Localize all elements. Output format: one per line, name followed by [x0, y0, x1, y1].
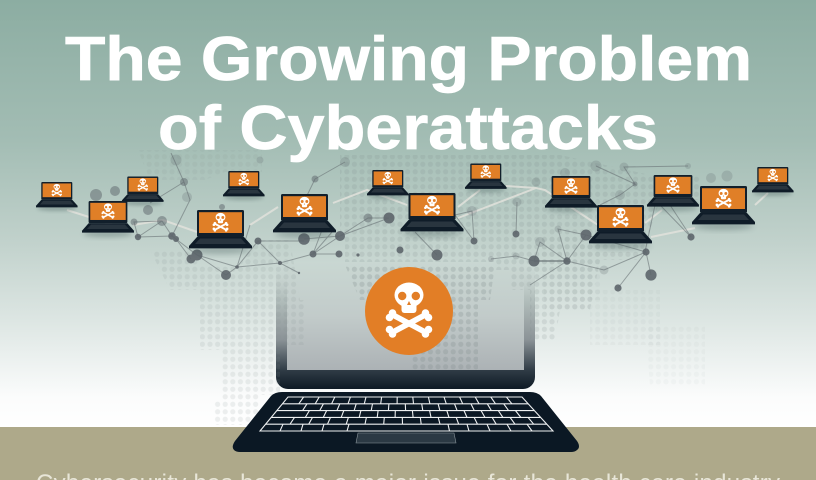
touchpad — [356, 433, 456, 443]
title: The Growing Problem — [65, 25, 752, 94]
network nodes — [90, 154, 732, 292]
network of pale connection lines — [67, 186, 768, 237]
keyboard — [260, 397, 553, 431]
dotted world map — [138, 150, 705, 425]
title: of Cyberattacks — [158, 94, 658, 163]
title — [65, 25, 752, 163]
large laptop screen lid — [276, 262, 535, 389]
large laptop base — [233, 392, 579, 452]
network of gray connection lines — [134, 153, 691, 288]
orange badge with skull and crossbones — [365, 267, 453, 355]
desk band — [0, 427, 816, 480]
infected laptops row — [36, 164, 794, 254]
